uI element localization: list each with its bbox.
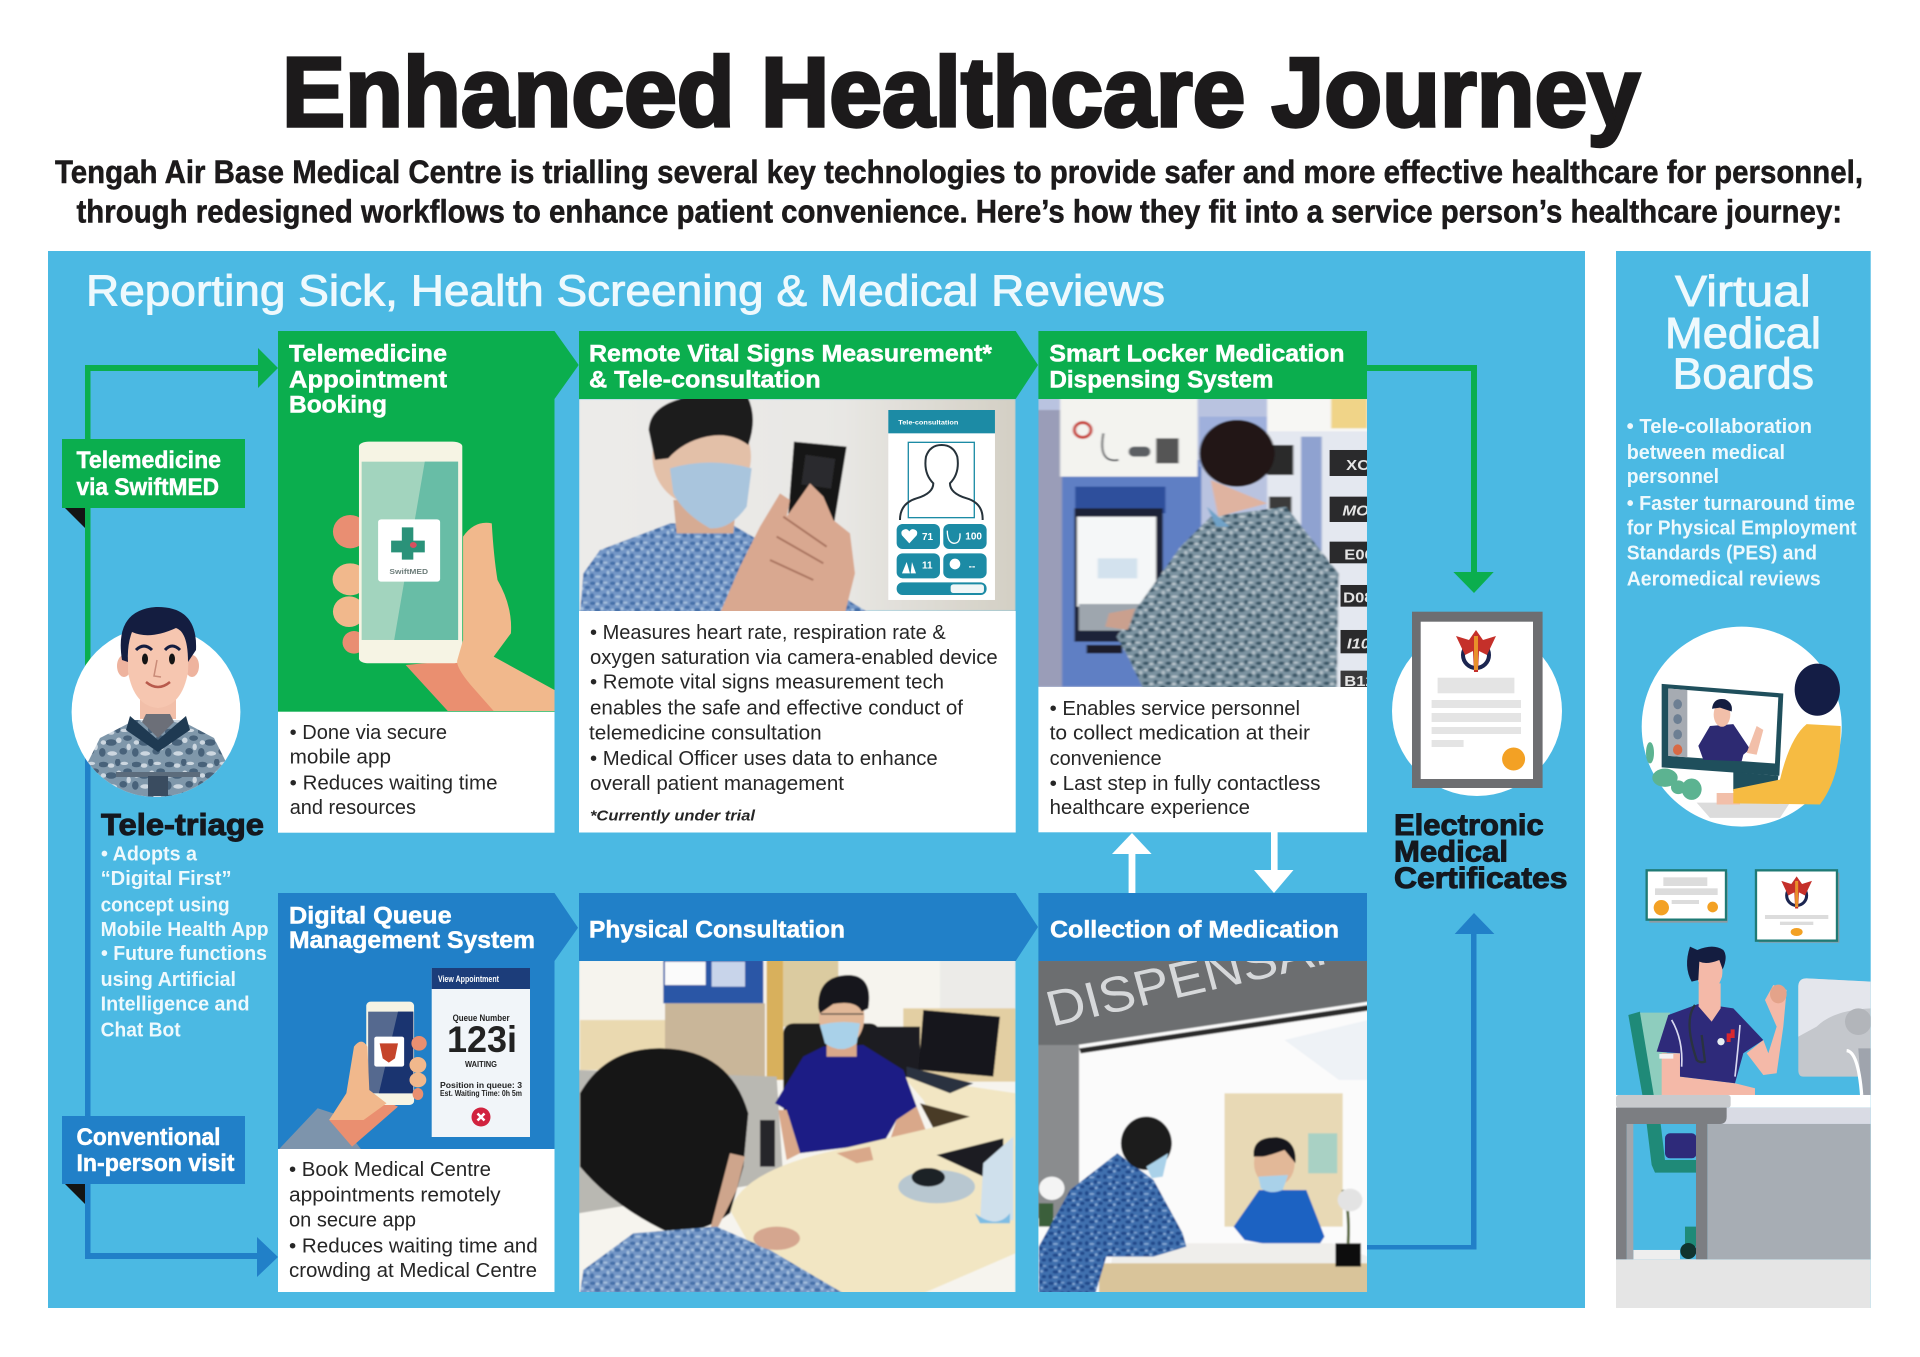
queue number screen [432, 968, 530, 1137]
icon: framed certificates on wall [1647, 870, 1839, 943]
intro text [55, 154, 1863, 230]
card text: on secure app [289, 1210, 416, 1232]
card text [289, 1159, 538, 1282]
text: virtual medical board bullets: Aeromedical reviews [1627, 569, 1821, 591]
card text: • Reduces waiting time and [289, 1236, 538, 1258]
card heading [289, 902, 535, 954]
card text: crowding at Medical Centre [289, 1260, 537, 1282]
card text: • Last step in fully contactless [1050, 773, 1320, 795]
photo: airman measuring vital signs with phone [579, 395, 1016, 613]
card text: and resources [290, 797, 416, 819]
text: virtual medical board bullets: for Physical Employment [1627, 518, 1857, 540]
text: tele-triage bullets: Intelligence and [101, 994, 250, 1016]
icon: hand holding phone with SwiftMED app [333, 442, 555, 711]
card heading [589, 341, 993, 394]
heading: electronic medical certificates: Certificates [1394, 862, 1567, 895]
arrow: collection to medical certificates [1367, 913, 1494, 1250]
photo: doctor consulting airman at desk [579, 960, 1016, 1293]
card text: overall patient management [590, 773, 844, 795]
label: conventional in-person visit: Conventional [76, 1124, 220, 1151]
photo: airman at smart locker kiosk: D08 [1343, 590, 1374, 606]
label: telemedicine via SwiftMED [62, 439, 245, 528]
card: physical consultation [579, 893, 1038, 1293]
queue number screen: Position in queue: 3 [440, 1081, 523, 1090]
panel heading: Boards [1673, 350, 1814, 398]
card text: mobile app [290, 746, 391, 768]
card heading: Physical Consultation [589, 916, 845, 943]
card heading: & Tele-consultation [589, 367, 821, 394]
text: virtual medical board bullets: Standards (PES) and [1627, 543, 1817, 565]
text: virtual medical board bullets: between medical [1627, 442, 1785, 464]
icon: hand holding phone with queue screen [278, 1002, 427, 1150]
photo: airman at smart locker kiosk: I10 [1347, 636, 1370, 652]
card text: • Reduces waiting time [290, 772, 498, 794]
card text [1050, 698, 1320, 819]
arrow: in-person path [85, 712, 278, 1277]
card heading: Dispensing System [1049, 367, 1274, 394]
card text: • Enables service personnel [1050, 698, 1300, 720]
photo: airman measuring vital signs with phone: 100 [965, 531, 982, 542]
photo: airman measuring vital signs with phone: 11 [922, 561, 933, 572]
card: collection of medication [1037, 893, 1390, 1293]
card text: enables the safe and effective conduct of [590, 698, 963, 720]
icon: video call with doctor [1642, 627, 1842, 827]
card text: convenience [1050, 748, 1162, 770]
panel: virtual medical boards [1616, 251, 1872, 1309]
card text: telemedicine consultation [589, 722, 822, 744]
card heading: Management System [289, 927, 535, 954]
card text: • Measures heart rate, respiration rate & [590, 622, 946, 644]
card heading: Remote Vital Signs Measurement* [589, 341, 993, 368]
text: tele-triage bullets: Chat Bot [101, 1020, 181, 1042]
card text: • Remote vital signs measurement tech [590, 672, 944, 694]
panel heading [1665, 267, 1821, 398]
arrow: smart locker to collection [1254, 832, 1294, 893]
photo: airman at smart locker kiosk: MO [1342, 503, 1369, 519]
card heading: Digital Queue [289, 902, 452, 929]
heading: electronic medical certificates [1394, 809, 1567, 895]
card text: appointments remotely [289, 1185, 501, 1207]
card heading: Appointment [289, 367, 447, 394]
icon: service person avatar [72, 607, 240, 800]
card text: • Book Medical Centre [289, 1159, 491, 1181]
text: tele-triage bullets: “Digital First” [101, 868, 232, 890]
photo: airman measuring vital signs with phone: 71 [922, 532, 934, 543]
card text: • Done via secure [290, 722, 447, 744]
icon: doctor at desk [1616, 947, 1872, 1309]
card heading: Telemedicine [289, 341, 447, 368]
card text: oxygen saturation via camera-enabled device [590, 647, 998, 669]
text: tele-triage bullets: • Future functions [101, 943, 267, 965]
card heading: Booking [289, 391, 387, 418]
queue number screen: 123i [447, 1019, 517, 1060]
photo: airman measuring vital signs with phone: -- [969, 561, 975, 572]
card text: to collect medication at their [1050, 722, 1310, 744]
card: smart locker medication dispensing system [1038, 331, 1375, 832]
photo: airman collecting medication at dispensary: DISPENSARY [1040, 907, 1390, 1038]
title: Enhanced Healthcare Journey [282, 37, 1640, 147]
text: virtual medical board bullets: • Faster turnaround time [1627, 493, 1855, 515]
card text [290, 722, 498, 819]
heading: electronic medical certificates: Electronic [1394, 809, 1544, 842]
text: tele-triage bullets [101, 844, 269, 1042]
card text: healthcare experience [1050, 797, 1250, 819]
card: digital queue management system [278, 893, 578, 1292]
queue number screen: View Appointment [438, 974, 499, 984]
text: tele-triage bullets: concept using [101, 895, 230, 917]
card text [589, 622, 998, 825]
card text: *Currently under trial [590, 808, 756, 825]
text: tele-triage bullets: Mobile Health App [101, 919, 269, 941]
icon: hand holding phone with SwiftMED app: SwiftMED [389, 567, 428, 576]
label: conventional in-person visit [62, 1116, 245, 1204]
queue number screen: Queue Number [453, 1013, 510, 1023]
panel heading: Reporting Sick, Health Screening & Medical Reviews [86, 267, 1165, 316]
arrow: smart locker to medical certificates [1367, 365, 1494, 593]
card heading [1049, 341, 1345, 394]
photo: airman at smart locker kiosk: XO [1346, 458, 1370, 474]
panel heading: Medical [1665, 309, 1821, 358]
photo: airman at smart locker kiosk: B12 [1344, 674, 1375, 690]
text: virtual medical board bullets: personnel [1627, 466, 1719, 488]
card: remote vital signs measurement and tele-consultation [579, 331, 1038, 832]
photo: airman at smart locker kiosk [1038, 398, 1375, 690]
photo: airman measuring vital signs with phone: Tele-consultation [898, 420, 958, 427]
arrow: telemedicine path [85, 348, 278, 715]
panel: reporting sick, health screening and medical reviews [48, 251, 1585, 1308]
heading: electronic medical certificates: Medical [1394, 836, 1508, 869]
heading: tele-triage: Tele-triage [101, 807, 264, 842]
label: telemedicine via SwiftMED: via SwiftMED [76, 474, 219, 501]
label: telemedicine via SwiftMED: Telemedicine [76, 447, 221, 474]
queue number screen: WAITING [465, 1060, 497, 1069]
text: virtual medical board bullets [1627, 416, 1857, 591]
photo: airman collecting medication at dispensary [1038, 961, 1367, 1292]
text: tele-triage bullets: using Artificial [101, 969, 236, 991]
icon: electronic medical certificate [1392, 612, 1562, 796]
card: telemedicine appointment booking [278, 331, 579, 833]
photo: airman at smart locker kiosk: E06 [1344, 547, 1374, 563]
card heading: Smart Locker Medication [1049, 341, 1345, 368]
arrow: collection to smart locker [1112, 833, 1152, 893]
label: conventional in-person visit: In-person visit [76, 1150, 235, 1177]
panel heading: Virtual [1675, 267, 1811, 316]
text: tele-triage bullets: • Adopts a [101, 844, 198, 866]
card heading [289, 341, 447, 418]
card text: • Medical Officer uses data to enhance [590, 748, 938, 770]
card heading: Collection of Medication [1050, 916, 1339, 943]
queue number screen: Est. Waiting Time: 0h 5m [440, 1089, 522, 1098]
text: virtual medical board bullets: • Tele-collaboration [1627, 416, 1812, 438]
